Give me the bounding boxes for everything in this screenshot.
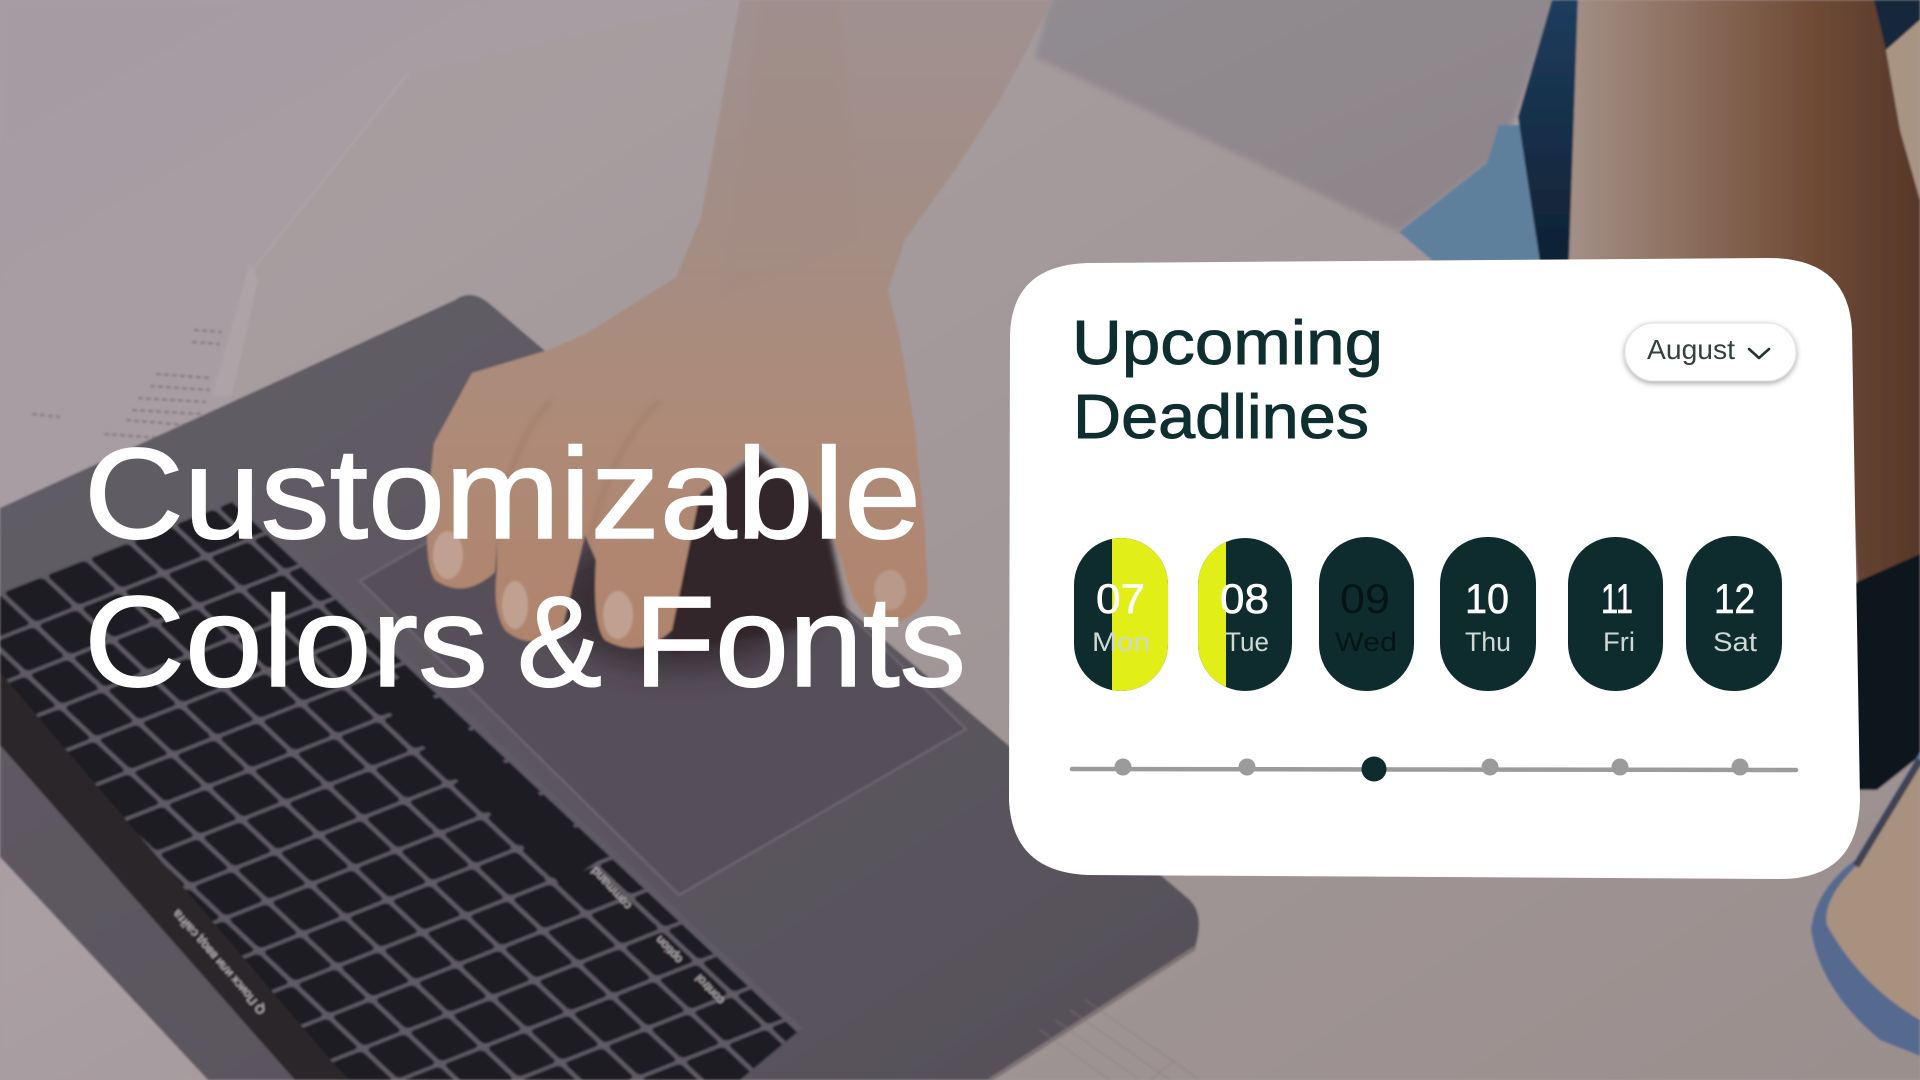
title line 2: & <box>517 570 602 714</box>
grid paper <box>1040 1000 1200 1080</box>
dark gap under hand <box>660 453 848 652</box>
jeans dark strip <box>1518 0 1578 262</box>
touch bar <box>0 672 350 1080</box>
day 09 Wed: Wed <box>1335 627 1397 657</box>
hand and wrist <box>427 0 1053 648</box>
month dropdown <box>1625 323 1796 381</box>
keyboard legends <box>170 864 727 1017</box>
day 09 Wed <box>1319 537 1414 691</box>
grey wall background top right <box>1035 0 1560 232</box>
dropdown pill <box>1625 323 1796 381</box>
day 07 Mon: Mon <box>1092 627 1150 657</box>
day 12 Sat: 12 <box>1714 575 1755 622</box>
icon: chevron <box>1749 349 1769 358</box>
right forearm <box>1569 0 1920 590</box>
speaker grille strip <box>370 673 606 885</box>
finger creases and nails <box>433 400 906 639</box>
day 12 Sat <box>1686 536 1782 691</box>
day 10 Thu <box>1440 537 1536 691</box>
keyboard legends: Q Поиск или ввод сайта <box>170 907 268 1017</box>
day 11 Fri: Fri <box>1603 627 1635 657</box>
dropdown label: August <box>1647 334 1735 365</box>
laptop body <box>0 295 1199 1080</box>
card heading <box>1072 309 1383 452</box>
laptop lower edge highlight <box>990 948 1195 1080</box>
jeans light denim <box>1399 125 1545 262</box>
card background <box>1009 258 1860 879</box>
hand shadow <box>550 530 810 670</box>
day 07 Mon: 07 <box>1096 575 1145 622</box>
timeline slider <box>1072 756 1796 782</box>
keyboard legends: command <box>588 864 634 913</box>
keyboard legends: option <box>653 933 685 967</box>
trackpad <box>360 415 966 895</box>
keyboard right edge <box>235 500 800 1030</box>
day 10 Thu: Thu <box>1465 627 1511 657</box>
lower arm with jeans cuff <box>1811 752 1920 1056</box>
day 10 Thu: 10 <box>1465 575 1509 622</box>
title <box>84 422 966 714</box>
title line 2: Colors <box>84 570 488 714</box>
dark navy top right <box>1874 0 1920 50</box>
heading line 1: Upcoming <box>1072 309 1383 378</box>
paper edge and printed text <box>32 73 408 438</box>
slider track <box>1072 769 1796 770</box>
panel: upcoming deadlines card <box>1009 258 1860 879</box>
day 08 Tue: Tue <box>1225 627 1269 657</box>
slider stops <box>1114 758 1748 776</box>
day 11 Fri: 11 <box>1601 575 1633 622</box>
day 08 Tue <box>1198 538 1292 691</box>
day 11 Fri <box>1568 537 1663 691</box>
day 12 Sat: Sat <box>1713 627 1758 657</box>
lighter skin top right <box>1886 20 1920 200</box>
slider active stop <box>1362 756 1386 782</box>
keyboard area <box>0 500 800 1080</box>
title line 2: Fonts <box>634 570 966 714</box>
forearm shading <box>720 0 860 300</box>
title line 1: Customizable <box>84 422 921 566</box>
dark clothing right <box>1850 554 1920 790</box>
day pills <box>1074 536 1782 691</box>
day 08 Tue: 08 <box>1220 575 1269 622</box>
title line 2 <box>84 570 966 714</box>
heading line 2: Deadlines <box>1073 383 1369 452</box>
day 09 Wed: 09 <box>1340 575 1390 622</box>
keyboard legends: control <box>692 972 727 1008</box>
day 07 Mon <box>1074 538 1168 691</box>
